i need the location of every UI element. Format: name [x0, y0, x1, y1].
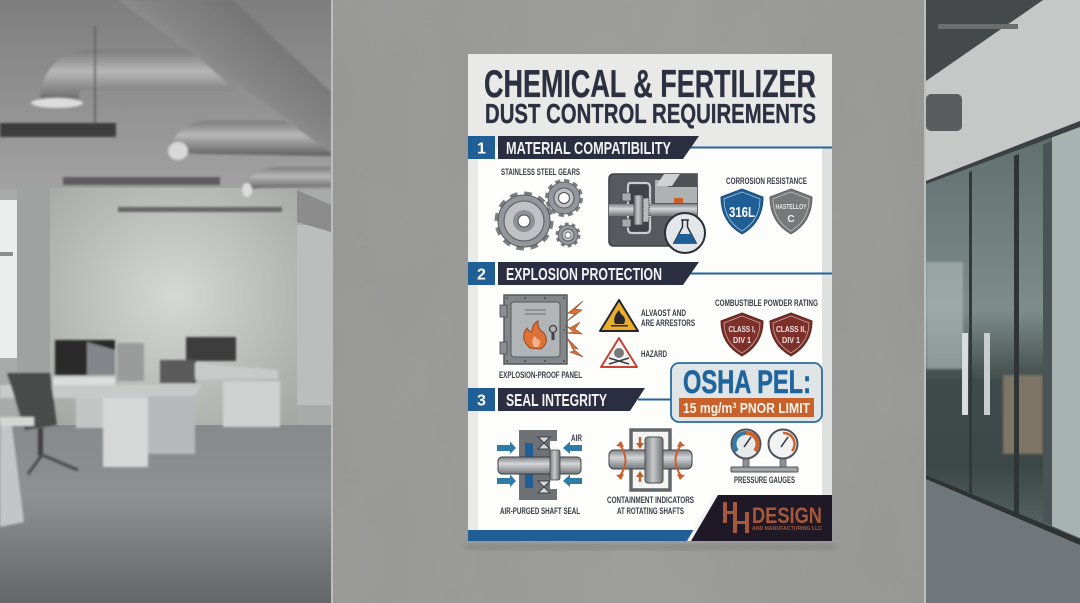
icon: flammable warning triangle [600, 300, 638, 331]
logo: wordmark: AND MANUFACTURING LLC [752, 526, 822, 532]
section header 3: seal integrity [468, 388, 674, 411]
icon: flask badge [665, 213, 705, 253]
title: CHEMICAL & FERTILIZER [484, 63, 816, 106]
badge: Hastelloy C shield [770, 189, 812, 234]
label: explosion-proof panel: EXPLOSION-PROOF PANEL [499, 370, 582, 380]
footer strip [468, 530, 696, 541]
section header 3: seal integrity: SEAL INTEGRITY [506, 390, 607, 410]
icon: gears [498, 182, 580, 248]
badge: Hastelloy C shield: C [787, 214, 795, 225]
badge: class II div 1: CLASS II, [776, 324, 806, 334]
label: air-purged shaft seal: AIR-PURGED SHAFT SEAL [500, 506, 580, 516]
icon: pressure gauges [731, 430, 798, 472]
label: containment indicators: CONTAINMENT INDICATORS [607, 495, 694, 505]
callout: OSHA PEL: OSHA PEL: [683, 364, 811, 400]
badge: class I div 1 [721, 313, 763, 356]
door handles [962, 333, 990, 415]
duct: middle [170, 121, 331, 156]
icon: explosion-proof panel [500, 295, 567, 364]
badge: class I div 1: DIV 1 [733, 335, 751, 345]
text: hazard: HAZARD [641, 349, 667, 359]
text: arrestors [641, 308, 695, 328]
section header 1: material compatibility [468, 136, 832, 159]
poster [468, 54, 832, 541]
badge: 316L shield [721, 189, 763, 234]
icon: air-purged shaft seal: AIR [571, 433, 582, 443]
icon: containment indicators [609, 430, 692, 490]
background: glass office right [926, 0, 1080, 603]
icon: sealed gearbox with flask [609, 174, 705, 253]
duct: upper horizontal [40, 50, 235, 104]
badge: class II div 1 [770, 313, 812, 356]
section header 2: explosion protection: 2 [477, 266, 486, 284]
duct: large diagonal [118, 0, 331, 154]
callout: OSHA PEL: 15 mg/m³ PNOR LIMIT [683, 400, 810, 417]
icon: air-purged shaft seal [497, 430, 582, 500]
title: DUST CONTROL REQUIREMENTS [485, 98, 816, 129]
badge: class I div 1: CLASS I, [728, 324, 756, 334]
background: office scene left [0, 0, 331, 603]
logo: wordmark: DESIGN [752, 503, 822, 528]
label: containment indicators: AT ROTATING SHAFTS [617, 506, 684, 516]
label: containment indicators [607, 495, 694, 516]
desks [53, 377, 115, 386]
icon: skull hazard triangle [601, 338, 637, 367]
badge: Hastelloy C shield: HASTELLOY [776, 202, 806, 211]
icon: sparks [565, 301, 583, 357]
pendant lights [0, 123, 116, 137]
section header 3: seal integrity: 3 [477, 392, 486, 410]
duct: back [243, 167, 331, 190]
background: concrete wall [331, 0, 926, 603]
section header 1: material compatibility: 1 [477, 140, 486, 158]
section header 2: explosion protection [468, 262, 832, 285]
section header 2: explosion protection: EXPLOSION PROTECTION [506, 264, 662, 284]
title [484, 63, 816, 129]
badge: class II div 1: DIV 1 [782, 335, 800, 345]
front desk [0, 417, 34, 426]
text: arrestors: ARE ARRESTORS [641, 318, 695, 328]
section header 1: material compatibility: MATERIAL COMPATIBILITY [506, 138, 671, 158]
poster body white panel [478, 148, 822, 533]
badge: 316L shield: 316L [729, 204, 755, 221]
text: arrestors: ALVAOST AND [641, 308, 686, 318]
logo: H&H monogram [723, 502, 749, 533]
callout: OSHA PEL [671, 363, 822, 422]
label: stainless steel gears: STAINLESS STEEL GEARS [501, 167, 580, 177]
logo block [687, 495, 832, 541]
monitors [55, 340, 115, 375]
label: pressure gauges: PRESSURE GAUGES [734, 475, 795, 485]
chair [7, 373, 57, 430]
label: combustible powder rating: COMBUSTIBLE POWDER RATING [715, 298, 818, 308]
label: corrosion resistance: CORROSION RESISTANCE [726, 176, 807, 186]
